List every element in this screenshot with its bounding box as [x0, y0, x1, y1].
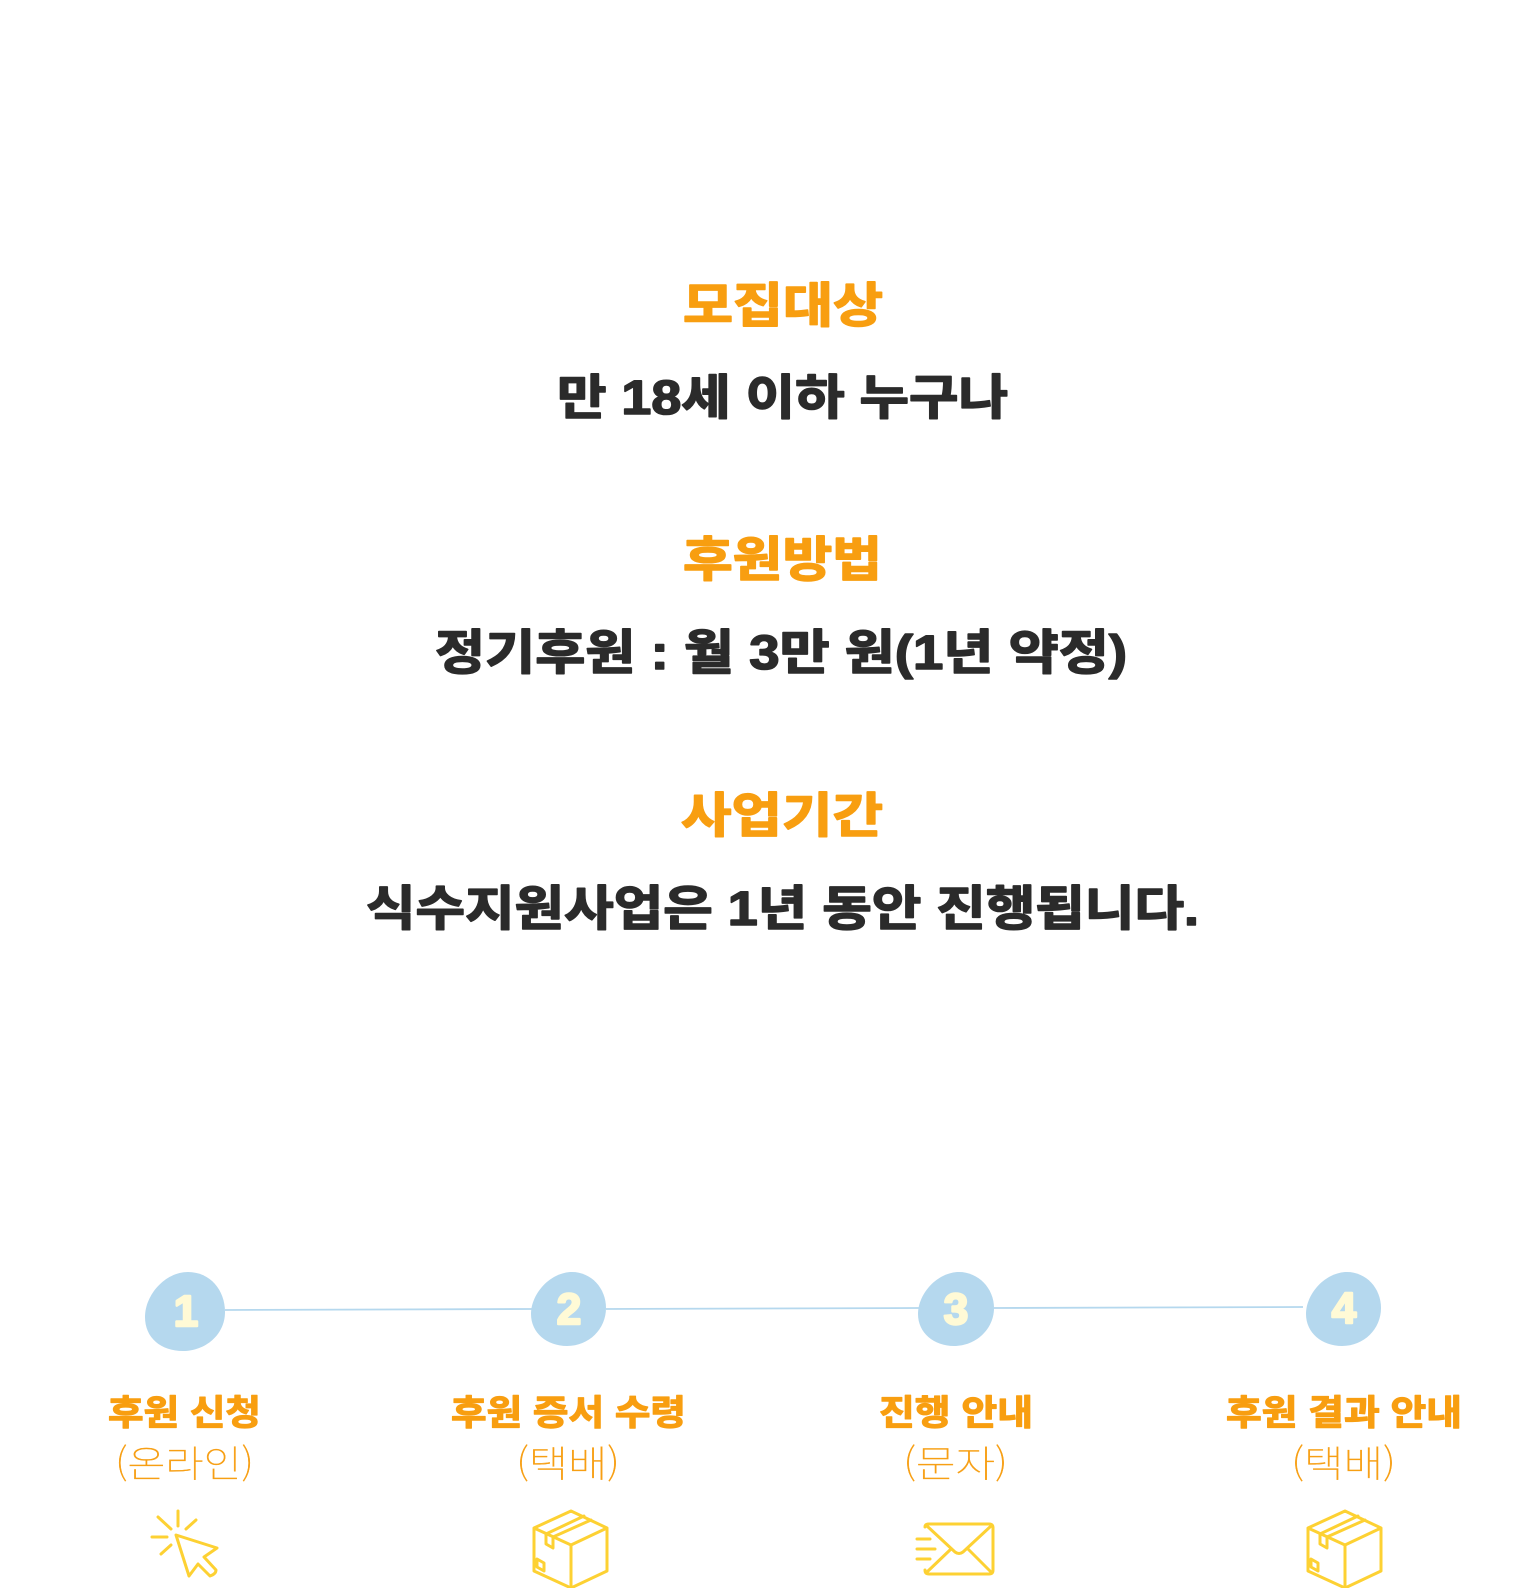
step 3 number badge: 3 — [944, 1285, 968, 1334]
step 1 number badge: 1 — [174, 1287, 198, 1336]
step 3 — [879, 1272, 1033, 1574]
process timeline — [108, 1272, 1462, 1588]
step 2 number badge — [531, 1272, 606, 1346]
section: project period — [366, 790, 1199, 936]
icon: cursor click — [152, 1511, 217, 1576]
text: 만 18세 이하 누구나: 만 18세 이하 누구나 — [557, 372, 1008, 425]
step 1 — [108, 1272, 261, 1576]
connector lines — [225, 1307, 1303, 1310]
text: 식수지원사업 기간: 식수지원사업은 1년 동안 진행됩니다. — [366, 883, 1199, 936]
heading: 모집대상: 모집대상 — [683, 280, 883, 333]
section: donation method — [435, 534, 1127, 680]
step 4 — [1226, 1272, 1462, 1588]
step 4 number badge: 4 — [1332, 1284, 1357, 1333]
step 2 subtitle: (택배) — [516, 1434, 620, 1488]
text: 정기후원: 정기후원 : 월 3만 원(1년 약정) — [435, 627, 1127, 680]
icon: sent envelope — [917, 1524, 993, 1574]
step 3 number badge — [918, 1272, 994, 1346]
step 1 number badge — [145, 1272, 225, 1351]
step 4 number badge — [1306, 1272, 1381, 1346]
heading: 후원방법: 후원방법 — [683, 534, 882, 587]
step 2 number badge: 2 — [557, 1285, 581, 1334]
step 1 title: 후원 신청 — [108, 1394, 261, 1433]
icon: parcel box — [1308, 1511, 1381, 1588]
step 2 title: 후원 증서 수령 — [451, 1394, 686, 1433]
icon: parcel box — [534, 1511, 607, 1588]
step 2 — [451, 1272, 686, 1588]
step 3 subtitle: (문자) — [903, 1434, 1008, 1488]
heading: 사업기간: 사업기간 — [681, 790, 883, 843]
step 4 title: 후원 결과 안내 — [1226, 1394, 1462, 1433]
section: recruitment target — [557, 280, 1008, 425]
step 4 subtitle: (택배) — [1291, 1434, 1396, 1488]
step 1 subtitle: (온라인) — [115, 1434, 254, 1488]
step 3 title: 진행 안내 — [879, 1394, 1033, 1433]
